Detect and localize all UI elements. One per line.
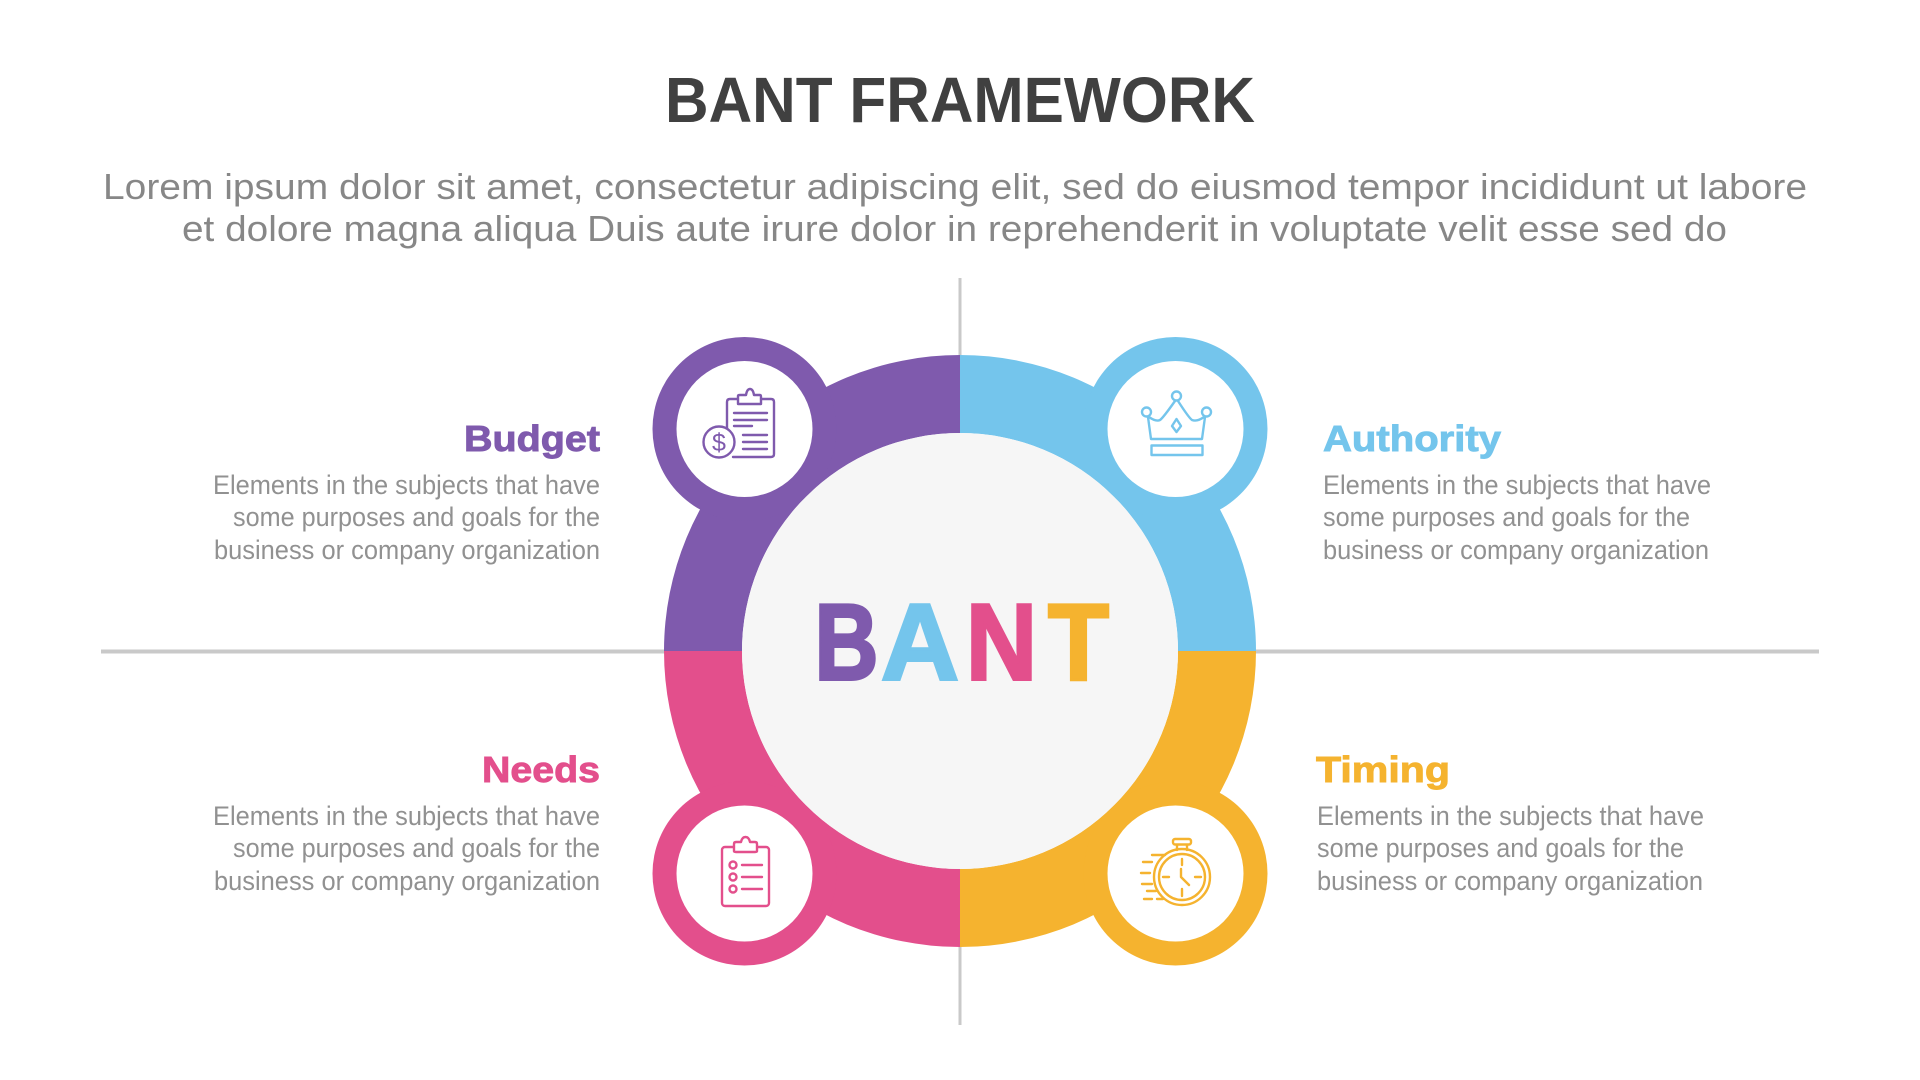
segment: budget <box>652 337 960 651</box>
text: timing: business or company organization <box>1317 866 1703 896</box>
text: needs: business or company organization <box>214 866 600 896</box>
text: authority: business or company organization <box>1323 535 1709 565</box>
text: authority <box>1323 418 1711 565</box>
subtitle text <box>103 166 1807 249</box>
segment: timing <box>960 651 1268 966</box>
subtitle text: Lorem ipsum dolor sit amet, consectetur adipiscing elit, sed do eiusmod tempor incididunt ut labore <box>103 166 1807 207</box>
horizontal axis line <box>101 650 1819 654</box>
text: timing: Timing <box>1316 749 1450 790</box>
center circle <box>742 433 1178 869</box>
text: needs: Elements in the subjects that have <box>213 801 600 831</box>
icon: timing stopwatch <box>1108 806 1244 942</box>
center word BANT: B <box>814 582 878 704</box>
icon: budget clipboard with coin <box>676 361 812 497</box>
text: needs: some purposes and goals for the <box>233 833 600 863</box>
segment: authority <box>960 337 1268 651</box>
text: timing <box>1316 749 1704 896</box>
text: budget: Budget <box>464 418 600 459</box>
text: authority: Elements in the subjects that have <box>1323 470 1711 500</box>
icon: needs checklist <box>676 806 812 942</box>
text: authority: Authority <box>1323 418 1501 459</box>
text: timing: some purposes and goals for the <box>1317 833 1684 863</box>
center word BANT: A <box>881 582 959 704</box>
subtitle text: et dolore magna aliqua Duis aute irure dolor in reprehenderit in voluptate velit esse sed do <box>182 208 1727 249</box>
text: budget: some purposes and goals for the <box>233 502 600 532</box>
title: BANT FRAMEWORK <box>665 64 1255 136</box>
text: needs <box>213 749 600 896</box>
icon: authority crown <box>1108 361 1244 497</box>
icon: budget clipboard with coin: $ <box>712 429 726 457</box>
center word BANT <box>814 582 1109 704</box>
text: budget: business or company organization <box>214 535 600 565</box>
segment: needs <box>652 651 960 966</box>
center word BANT: T <box>1048 582 1109 704</box>
text: needs: Needs <box>482 749 600 790</box>
center word BANT: N <box>966 582 1037 704</box>
vertical axis line <box>958 278 962 1025</box>
text: timing: Elements in the subjects that have <box>1317 801 1704 831</box>
text: budget: Elements in the subjects that have <box>213 470 600 500</box>
text: budget <box>213 418 600 565</box>
text: authority: some purposes and goals for the <box>1323 502 1690 532</box>
